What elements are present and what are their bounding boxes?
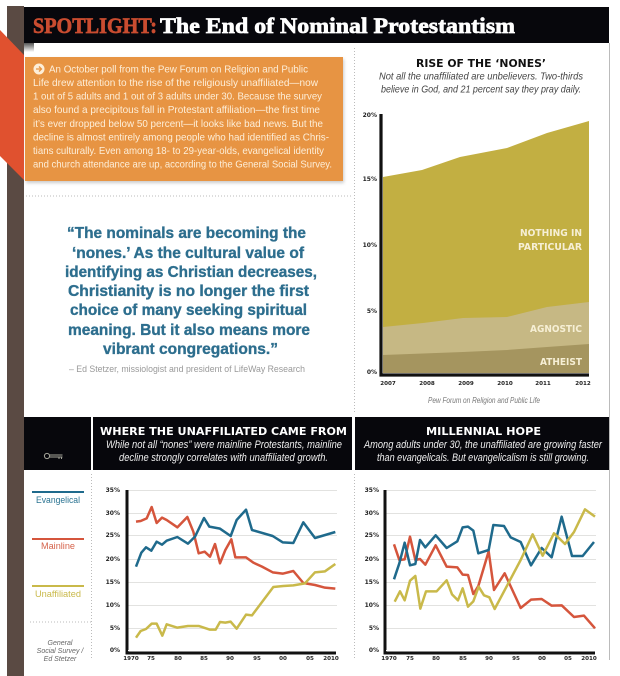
y axis labels: 20% xyxy=(106,556,120,563)
x axis labels: 00 xyxy=(538,656,546,662)
x axis labels: 1970 xyxy=(123,656,139,662)
x axis labels: 75 xyxy=(406,656,414,662)
intro text: decline is almost entirely among people who had identified as Chris- xyxy=(33,132,329,144)
intro text: 1 out of 5 adults and 1 out of 3 adults under 30. Because the survey xyxy=(33,92,323,102)
chart: where the unaffiliated came from xyxy=(106,487,339,662)
x axis labels: 80 xyxy=(432,656,440,662)
stacked area chart xyxy=(363,112,591,387)
y axis labels: 15% xyxy=(365,579,379,586)
chart source: Pew Forum on Religion and Public Life xyxy=(428,396,540,405)
header: where the unaffiliated came from: While not all “nones” were mainline Protestants, mainline xyxy=(106,439,342,451)
title text: The End of Nominal Protestantism xyxy=(160,13,515,38)
pull quote: identifying as Christian decreases, xyxy=(65,264,317,281)
x axis labels: 90 xyxy=(485,656,493,662)
header: millennial hope xyxy=(355,417,609,470)
area labels: AGNOSTIC xyxy=(530,324,582,335)
legend source: Social Survey / xyxy=(37,648,84,655)
header: where the unaffiliated came from: decline strongly correlates with unaffiliated growth. xyxy=(119,452,328,464)
y axis labels: 35% xyxy=(365,487,379,494)
y axis labels xyxy=(363,112,377,376)
legend: unaffiliated xyxy=(32,585,84,600)
x axis labels: 2009 xyxy=(458,381,474,387)
chart heading: RISE OF THE ‘NONES’ xyxy=(416,57,546,70)
chart: millennial hope xyxy=(365,487,597,662)
y axis labels: 0% xyxy=(367,369,377,376)
y axis labels: 5% xyxy=(367,308,377,315)
y axis labels xyxy=(106,487,120,654)
header: where the unaffiliated came from: WHERE THE UNAFFILIATED CAME FROM xyxy=(100,425,347,438)
left brown spine xyxy=(7,6,24,676)
y axis labels: 5% xyxy=(369,625,379,632)
x axis labels: 95 xyxy=(253,656,261,662)
intro text: and church attendance are up, according to the General Social Survey. xyxy=(33,160,332,170)
pull quote: choice of many seeking spiritual xyxy=(70,302,307,319)
title text: SPOTLIGHT: xyxy=(33,13,157,38)
pull quote: ‘nones.’ As the cultural value of xyxy=(72,245,305,262)
series lines xyxy=(394,509,595,628)
legend: evangelical: Evangelical xyxy=(36,495,80,506)
x axis labels: 2010 xyxy=(497,381,513,387)
legend: unaffiliated: Unaffiliated xyxy=(35,589,81,600)
x axis labels: 2010 xyxy=(323,656,339,662)
y axis labels: 30% xyxy=(106,510,120,517)
x axis labels: 1970 xyxy=(381,656,397,662)
y axis labels: 0% xyxy=(110,647,120,654)
title bar xyxy=(24,7,609,52)
chart subtitle: believe in God, and 21 percent say they pray daily. xyxy=(381,84,581,96)
pull quote: “The nominals are becoming the xyxy=(67,225,306,242)
x axis labels: 2010 xyxy=(581,656,597,662)
intro text xyxy=(33,64,332,170)
legend source xyxy=(37,640,84,663)
x axis labels xyxy=(123,656,339,662)
intro text: tians culturally. Even among 18- to 29-year-olds, evangelical identity xyxy=(33,146,325,157)
y axis labels: 10% xyxy=(106,602,120,609)
y axis labels: 25% xyxy=(106,532,120,539)
y axis labels xyxy=(365,487,379,654)
header: where the unaffiliated came from xyxy=(93,417,352,470)
area labels xyxy=(518,228,583,368)
y axis labels: 35% xyxy=(106,487,120,494)
header: millennial hope: MILLENNIAL HOPE xyxy=(426,425,541,438)
series lines xyxy=(136,507,335,638)
x axis labels: 2012 xyxy=(575,381,591,387)
legend source: Ed Stetzer xyxy=(44,656,77,663)
pull quote xyxy=(65,225,317,375)
x axis labels: 85 xyxy=(200,656,208,662)
quote attribution: – Ed Stetzer, missiologist and president of LifeWay Research xyxy=(69,364,305,375)
x axis labels: 95 xyxy=(512,656,520,662)
x axis labels: 80 xyxy=(174,656,182,662)
pull quote: meaning. But it also means more xyxy=(68,322,310,339)
y axis labels: 25% xyxy=(365,532,379,539)
intro text: Life drew attention to the rise of the religiously unaffiliated—now xyxy=(33,78,319,89)
y axis labels: 5% xyxy=(110,625,120,632)
y axis labels: 10% xyxy=(365,602,379,609)
intro text: it’s ever dropped below 50 percent—it looks like bad news. But the xyxy=(33,119,323,130)
intro text: An October poll from the Pew Forum on Religion and Public xyxy=(49,64,308,76)
panel: intro callout xyxy=(25,57,344,183)
x axis labels: 85 xyxy=(459,656,467,662)
x axis labels: 90 xyxy=(226,656,234,662)
icon: key xyxy=(44,453,62,459)
x axis labels: 2008 xyxy=(419,381,435,387)
area labels: PARTICULAR xyxy=(518,242,583,253)
area labels: NOTHING IN xyxy=(520,228,582,239)
y axis labels: 10% xyxy=(363,242,377,249)
y axis labels: 20% xyxy=(363,112,377,119)
right edge line xyxy=(608,43,610,660)
x axis labels: 00 xyxy=(279,656,287,662)
y axis labels: 15% xyxy=(106,579,120,586)
y axis labels: 30% xyxy=(365,510,379,517)
chart subtitle: Not all the unaffiliated are unbelievers. Two-thirds xyxy=(379,70,584,82)
legend source: General xyxy=(48,640,73,647)
legend: mainline: Mainline xyxy=(41,541,75,552)
x axis labels: 75 xyxy=(147,656,155,662)
y axis labels: 20% xyxy=(365,556,379,563)
legend: mainline xyxy=(32,538,84,552)
x axis labels xyxy=(380,381,591,387)
legend: evangelical xyxy=(32,491,84,506)
y axis labels: 15% xyxy=(363,176,377,183)
key header block xyxy=(24,417,91,470)
icon: arrow bullet xyxy=(34,64,44,74)
intro text: also found a precipitous fall in Protestant affiliation—the first time xyxy=(33,105,320,116)
x axis labels: 2011 xyxy=(535,381,551,387)
x axis labels: 05 xyxy=(306,656,314,662)
x axis labels: 2007 xyxy=(380,381,396,387)
x axis labels: 05 xyxy=(564,656,572,662)
x axis labels xyxy=(381,656,597,662)
area labels: ATHEIST xyxy=(540,357,582,368)
red ribbon accent xyxy=(0,30,24,180)
y axis labels: 0% xyxy=(369,647,379,654)
pull quote: vibrant congregations.” xyxy=(103,341,278,358)
legend xyxy=(30,491,91,663)
chart subtitle xyxy=(379,70,584,96)
panel: rise of the nones xyxy=(363,57,591,405)
pull quote: Christianity is no longer the first xyxy=(68,283,310,300)
